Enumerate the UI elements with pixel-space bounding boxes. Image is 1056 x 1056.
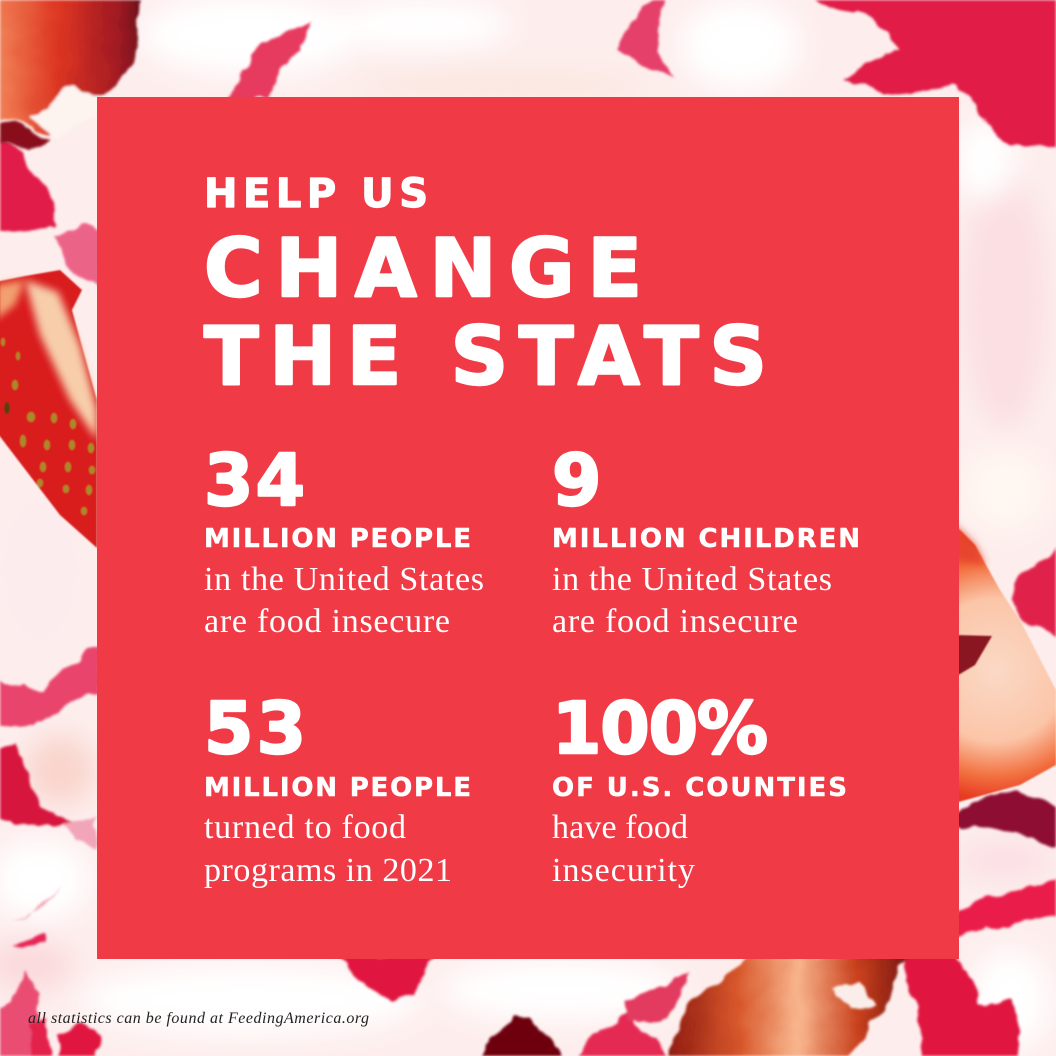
- stat: 53 million people: programs in 2021: [204, 852, 452, 889]
- stat: 34 million people: are food insecure: [204, 603, 450, 640]
- stat: 100% of counties: [552, 687, 847, 889]
- stat: 34 million people: in the United States: [204, 561, 484, 598]
- stat: 100% of counties: have food: [552, 809, 688, 846]
- stat: 53 million people: 53: [204, 687, 306, 770]
- stat: 9 million children: 9: [552, 439, 601, 522]
- stat: 53 million people: [204, 687, 471, 889]
- heading: change the stats: CHANGE: [204, 222, 642, 315]
- heading: change the stats: THE STATS: [204, 310, 767, 403]
- stat: 53 million people: MILLION PEOPLE: [204, 773, 471, 803]
- heading: change the stats: [204, 222, 767, 403]
- stat: 53 million people: turned to food: [204, 809, 406, 846]
- stat: 9 million children: MILLION CHILDREN: [552, 524, 860, 554]
- stat: 34 million people: MILLION PEOPLE: [204, 524, 471, 554]
- stat: 100% of counties: insecurity: [552, 852, 695, 889]
- strawberry top left: [0, 0, 142, 148]
- red panel: [97, 97, 959, 959]
- source note: all statistics can be found at FeedingAmerica.org: [28, 1010, 369, 1027]
- stat: 9 million children: in the United States: [552, 561, 832, 598]
- stat: 100% of counties: 100%: [552, 687, 768, 770]
- strawberry left with seeds: [0, 270, 97, 548]
- stat: 9 million children: [552, 439, 860, 640]
- stat: 9 million children: are food insecure: [552, 603, 798, 640]
- stat: 100% of counties: OF U.S. COUNTIES: [552, 773, 847, 803]
- heading: help us: HELP US: [204, 171, 428, 217]
- stat: 34 million people: 34: [204, 439, 305, 522]
- dark cavity bottom: [478, 1018, 570, 1056]
- strawberry right: [955, 525, 1056, 803]
- cream blob on bottom strawberry: [832, 982, 875, 1012]
- stat: 34 million people: [204, 439, 484, 640]
- strawberry bottom: [668, 955, 905, 1056]
